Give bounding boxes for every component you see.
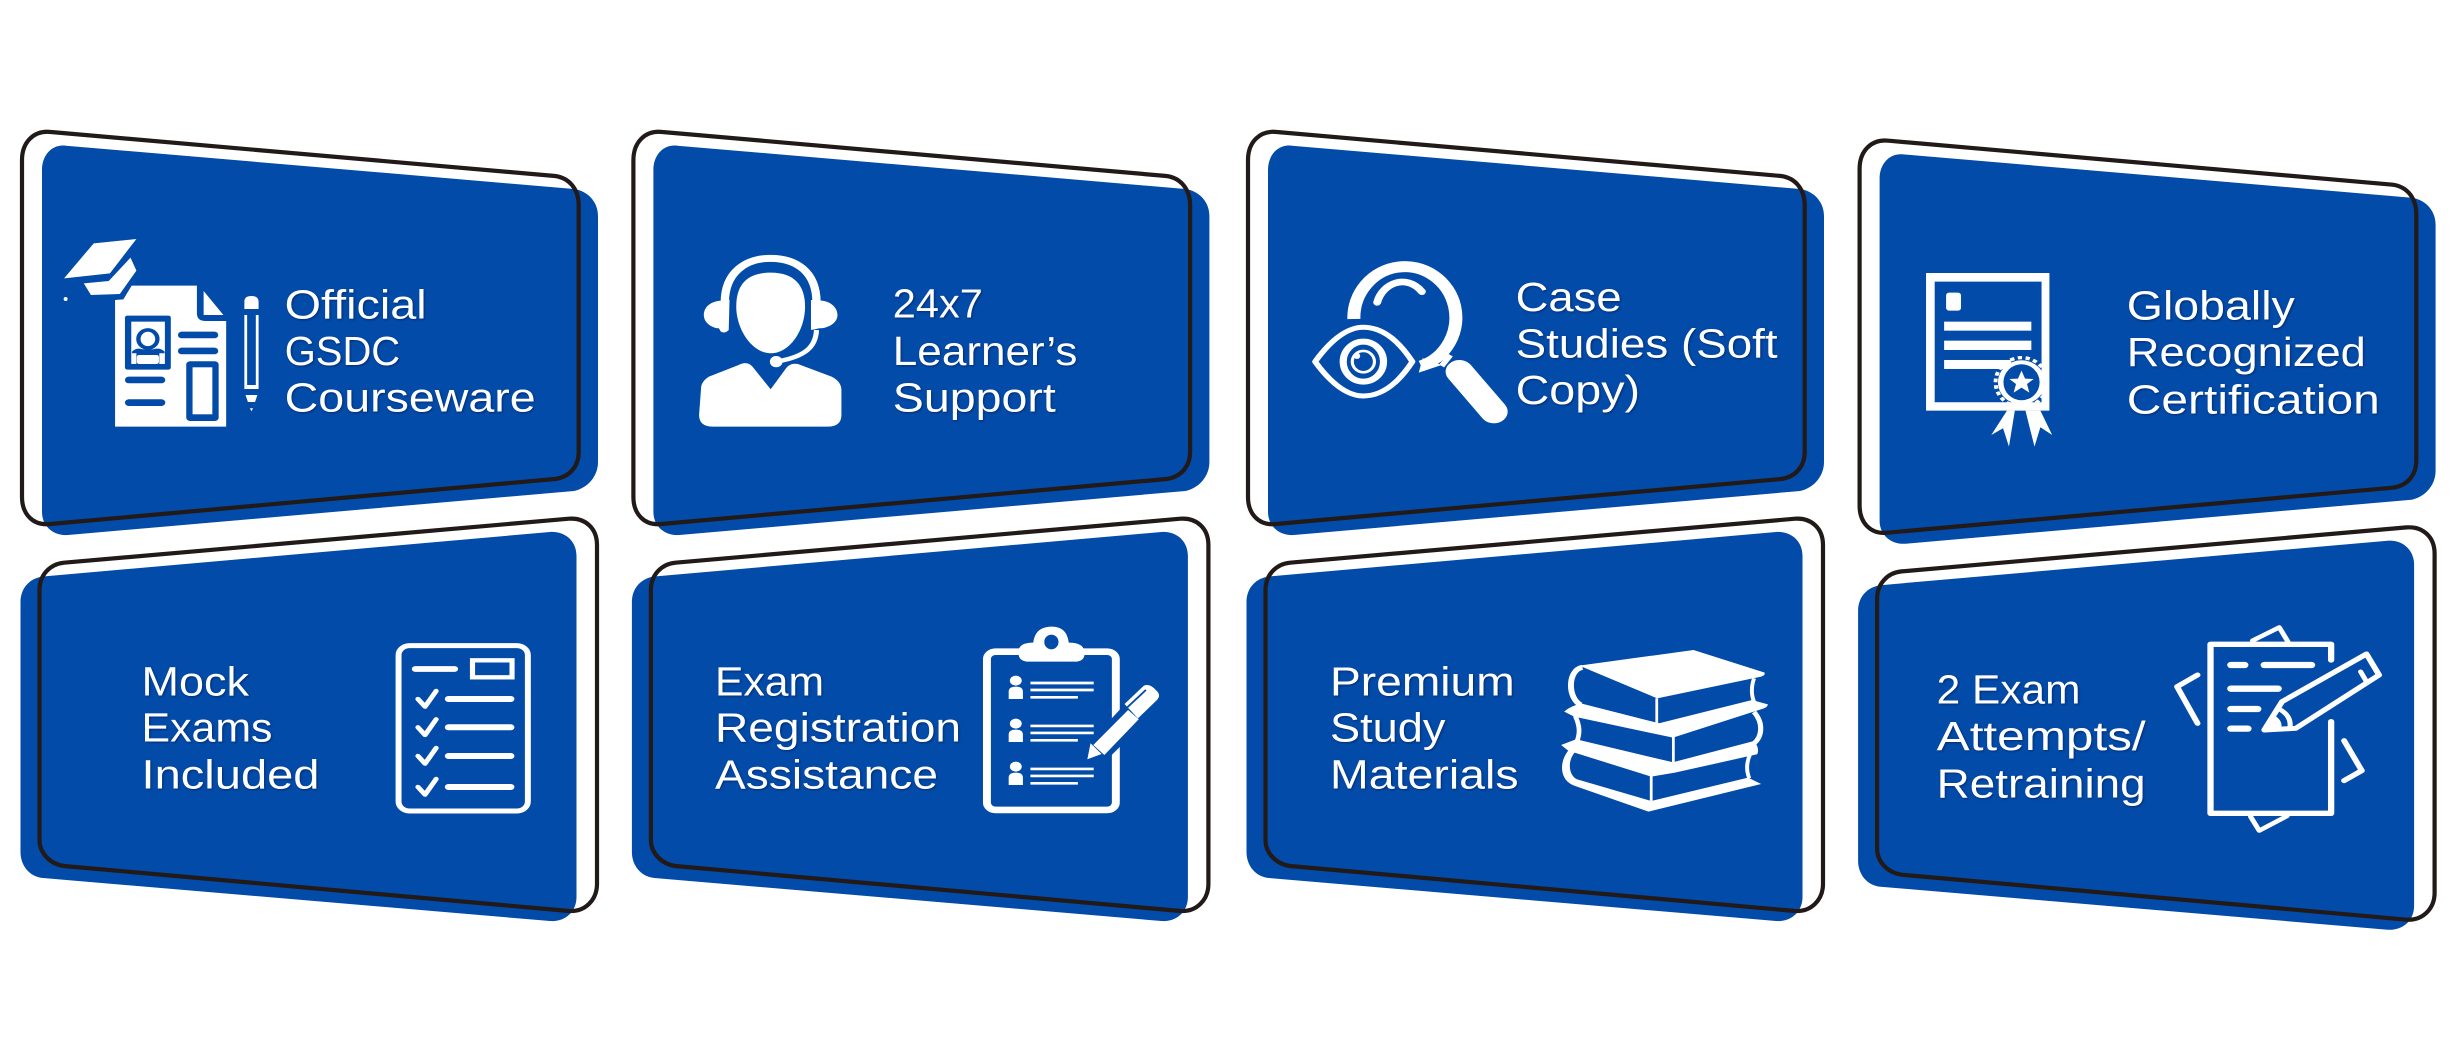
label [142,659,320,798]
label: Registration [715,705,961,751]
label [715,659,961,798]
label [893,280,1077,421]
label: Exams [142,705,272,751]
label: Attempts/ [1937,713,2146,759]
panel: Exam Registration Assistance [632,519,1208,921]
label [1937,666,2146,806]
label: Case [1516,274,1622,320]
label [1330,659,1519,798]
icon: eye and magnifying glass [1315,267,1494,412]
label: Study [1330,705,1446,751]
card background [1858,541,2414,930]
icon: exam sheets with pencil [2177,627,2379,831]
label: Globally [2127,282,2295,328]
card outline [40,519,597,911]
label: Mock [142,659,250,705]
label: Assistance [715,752,938,798]
label: Support [893,375,1056,421]
card background [1246,532,1802,921]
panel: Official GSDC Courseware [22,132,598,535]
label: Studies (Soft [1516,320,1778,366]
card background [632,532,1188,921]
label: GSDC [285,328,400,374]
card outline [1877,527,2435,920]
label: Courseware [285,375,536,421]
label: Exam [715,659,824,705]
label [2127,282,2380,422]
card outline [651,519,1208,911]
icon: courseware document with graduation cap and pencil [64,239,259,427]
panel: Globally Recognized Certification [1860,140,2436,544]
label: Included [142,752,320,798]
label: Premium [1330,659,1515,705]
label: 2 Exam [1937,666,2080,712]
panel: Case Studies (Soft Copy) [1248,132,1824,535]
label [1516,274,1778,413]
card background [42,146,598,535]
icon: exam checklist [399,646,528,811]
card background [1880,154,2436,544]
label [285,281,536,421]
label: Copy) [1516,367,1640,413]
label: Learner’s [893,328,1077,374]
panel: 2 Exam Attempts/Retraining [1858,527,2435,930]
icon: certificate with ribbon seal [1926,273,2052,447]
card background [20,532,576,921]
panel: Premium Study Materials [1246,519,1823,921]
label: Retraining [1937,760,2146,806]
card outline [1248,132,1805,524]
card background [1268,146,1824,535]
label: Official [285,281,427,327]
icon: support agent with headset [699,258,841,427]
card outline [1860,140,2416,533]
label: Materials [1330,752,1519,798]
card background [653,146,1209,535]
panel: 24x7 Learner's Support [633,132,1209,535]
label: Recognized [2127,329,2366,375]
icon: registration clipboard with pen [987,627,1159,810]
card outline [633,132,1190,524]
card outline [22,132,579,524]
card outline [1266,519,1823,911]
label: 24x7 [893,280,983,326]
panel: Mock Exams Included [20,519,597,921]
label: Certification [2127,376,2380,422]
icon: stack of books [1561,650,1768,812]
